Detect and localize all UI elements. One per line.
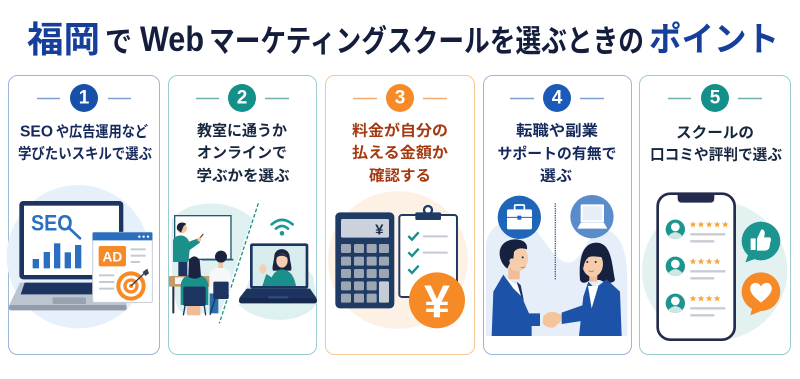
title: Web (140, 20, 204, 59)
teacher (173, 223, 203, 277)
heading 4: 選ぶ (540, 168, 572, 184)
heading 2: オンラインで (197, 144, 287, 162)
review rows: ★★★★★ (689, 221, 729, 231)
heading 3: 料金が自分の (352, 122, 448, 140)
heading 3 (352, 122, 448, 184)
clipboard (399, 206, 457, 297)
number badge 5: 5 (710, 88, 721, 108)
icon: briefcase (498, 196, 541, 239)
handshake (543, 312, 562, 328)
heading 1 (18, 122, 152, 162)
heading 4: 転職や副業 (516, 122, 598, 140)
icon: thumbs up bubble (742, 222, 780, 262)
review rows: ★★★★ (689, 258, 721, 268)
heading 1: や広告運用など (56, 122, 148, 140)
online laptop (239, 243, 317, 303)
title: マーケティングスクールを選ぶときの (209, 24, 644, 59)
heading 1: SEO (20, 124, 53, 140)
icon: heart bubble (742, 272, 780, 315)
illustration: SEO laptop and ad window (7, 185, 152, 328)
number badge 4: 4 (552, 88, 563, 108)
number badge 1: 1 (79, 88, 90, 108)
number badge 2 (228, 84, 256, 112)
woman (562, 243, 622, 336)
panel 4: career support (484, 76, 632, 354)
phone (658, 193, 735, 340)
title: で (105, 26, 132, 59)
heading 5 (650, 124, 782, 164)
review rows: ★★★★ (689, 295, 721, 305)
number badge 1 (70, 84, 98, 112)
number badge 3 (386, 84, 414, 112)
title: 福岡 (27, 19, 100, 60)
illustration: handshake and career icons (486, 195, 627, 336)
heading 2: 教室に通うか (197, 122, 287, 140)
heading 3: 払える金額か (352, 144, 448, 162)
illustration: SEO laptop and ad window: AD (102, 249, 122, 264)
heading 3: 確認する (369, 166, 431, 184)
number badge 3: 3 (395, 88, 405, 108)
man (492, 239, 540, 336)
number badge 5 (701, 84, 729, 112)
yen coin: ¥ (424, 275, 450, 327)
heading 4: サポートの有無で (498, 146, 616, 162)
title: ポイント (649, 21, 779, 59)
students (181, 251, 231, 315)
title (27, 19, 779, 60)
panel 5: reviews (640, 76, 790, 354)
illustration: phone reviews and reaction bubbles (642, 193, 787, 341)
number badge 4 (543, 84, 571, 112)
desk (169, 276, 211, 313)
review rows (666, 220, 729, 315)
number badge 2: 2 (237, 88, 247, 108)
calculator: ¥ (375, 222, 384, 239)
heading 2: 学ぶかを選ぶ (196, 166, 290, 184)
icon: laptop (570, 195, 614, 238)
illustration: classroom and online lesson (169, 203, 317, 323)
icon: wifi (272, 220, 293, 235)
heading 1: 学びたいスキルで選ぶ (18, 144, 152, 162)
panel 3: tuition (326, 76, 474, 354)
panel 2: classroom or online (168, 76, 317, 354)
heading 5: 口コミや評判で選ぶ (650, 146, 782, 164)
heading 4 (498, 122, 616, 184)
panel 1: skills (7, 76, 159, 354)
heading 2 (196, 122, 290, 184)
heading 5: スクールの (676, 124, 754, 142)
illustration: calculator, checklist and yen coin (328, 191, 468, 329)
illustration: SEO laptop and ad window: SEO (31, 211, 73, 236)
